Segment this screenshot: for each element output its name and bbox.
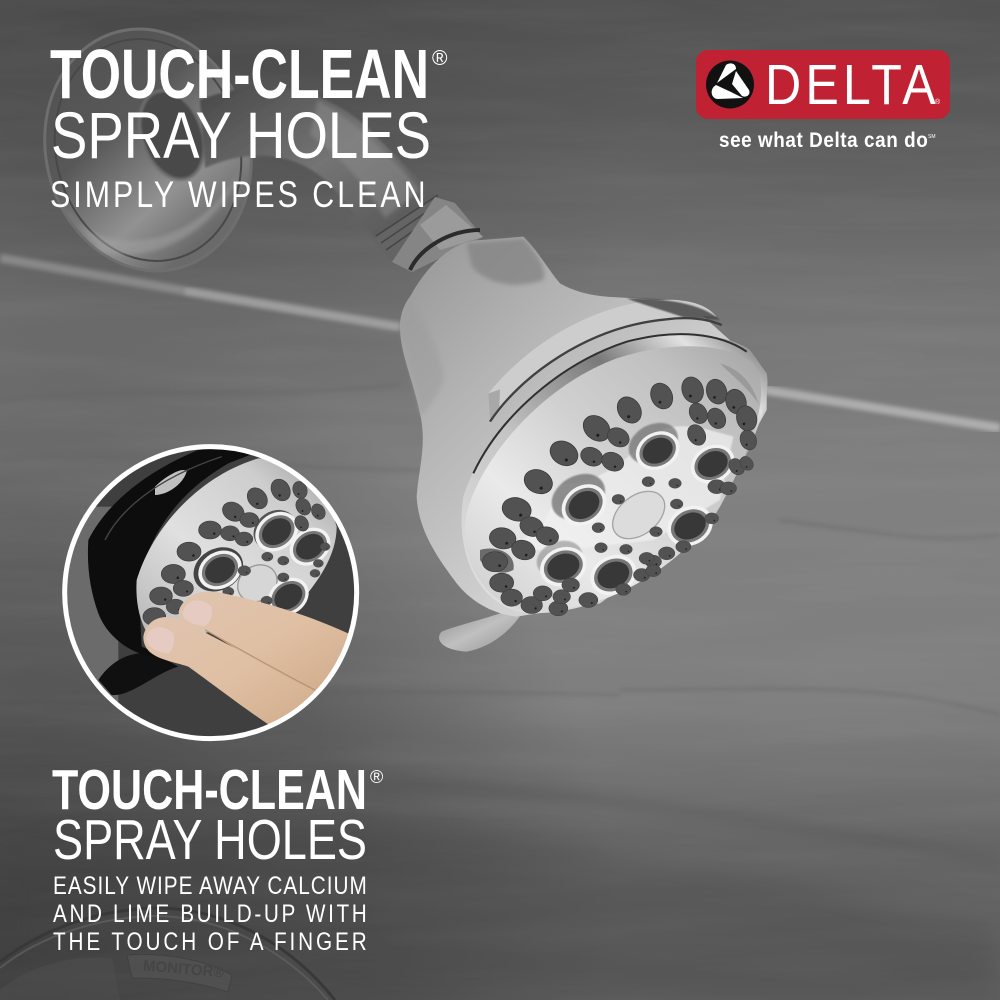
large spray rings (534, 424, 741, 602)
inset center button (237, 564, 278, 602)
heading line: SIMPLY WIPES CLEAN: SIMPLY WIPES CLEAN (50, 174, 426, 216)
registered mark: ® (935, 98, 941, 106)
nails (183, 600, 212, 626)
face reflections (510, 426, 733, 550)
inset wall patch (67, 506, 118, 702)
body line 2: AND LIME BUILD-UP WITH (53, 899, 367, 927)
heading line: SPRAY HOLES: SPRAY HOLES (51, 98, 431, 172)
threaded section (372, 197, 452, 262)
face rim (462, 334, 767, 613)
lever blade (439, 607, 525, 652)
shower head, drawn in 3x coordinates (400, 237, 767, 652)
inset rings (194, 510, 330, 613)
wall escutcheon plate (20, 7, 276, 293)
inset photo: finger wiping spray holes (55, 440, 365, 745)
DELTA wordmark: DELTA (765, 53, 936, 117)
heading line: TOUCH-CLEAN: TOUCH-CLEAN (50, 35, 429, 113)
shower arm (200, 87, 483, 272)
monitor dial, bottom left (0, 908, 335, 1000)
spray face (465, 346, 761, 612)
dial label: MONITOR® (142, 957, 225, 981)
registered mark: ® (432, 47, 448, 70)
neck reflection left (400, 300, 444, 417)
head body (400, 237, 767, 617)
fingers (143, 591, 352, 727)
Delta triangle icon (706, 60, 754, 108)
head side, black chrome (88, 449, 250, 654)
neck shadow (467, 238, 544, 285)
inset background (96, 449, 354, 736)
tile joint, left (0, 258, 400, 327)
heading line: SPRAY HOLES: SPRAY HOLES (53, 808, 367, 872)
bottom text block (52, 758, 383, 955)
center button (604, 482, 674, 548)
inset nozzles (143, 476, 330, 626)
top heading (50, 35, 448, 216)
outer nozzle row (500, 374, 760, 524)
red badge (696, 50, 950, 119)
chrome collar (488, 300, 717, 423)
registered mark: ® (370, 767, 383, 787)
lower edge nozzles (482, 480, 737, 616)
Delta logo (696, 50, 950, 152)
inner nozzle cluster (488, 400, 759, 563)
service mark: SM (928, 134, 936, 140)
small center nozzles (592, 477, 683, 554)
lever, black (98, 653, 178, 695)
tile joint, right (765, 390, 1000, 428)
body line 3: THE TOUCH OF A FINGER (53, 927, 367, 955)
hex nut (392, 197, 483, 272)
inset ring (65, 447, 357, 739)
body line 1: EASILY WIPE AWAY CALCIUM (53, 871, 367, 899)
heading line: TOUCH-CLEAN: TOUCH-CLEAN (52, 758, 367, 822)
chrome shadows around rings (543, 465, 613, 529)
inset spray face (136, 458, 337, 643)
tagline: see what Delta can do (719, 129, 928, 152)
rim shadow line (473, 334, 747, 473)
